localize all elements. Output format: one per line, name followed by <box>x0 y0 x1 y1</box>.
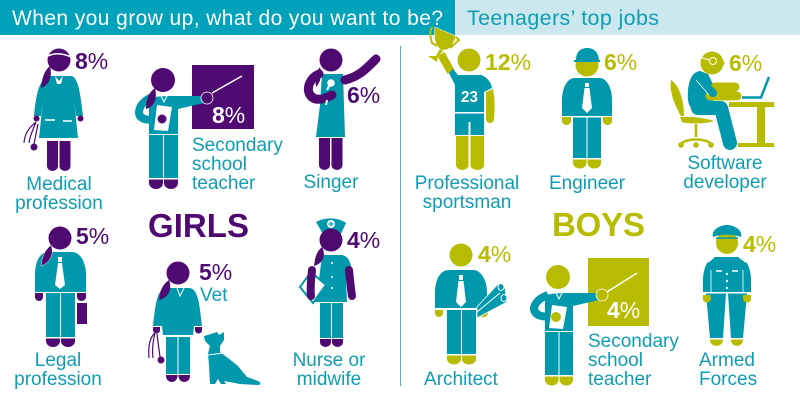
label: professional sportsman: sportsman <box>423 192 511 213</box>
header: left banner: When you grow up, what do you want to be? <box>12 7 443 30</box>
centre divider <box>400 46 402 386</box>
label: software developer: Software <box>688 153 762 174</box>
label: legal profession: Legal <box>35 350 81 371</box>
value: vet 5%: 5% <box>199 259 232 285</box>
label: girl secondary school teacher: Secondary <box>192 135 283 156</box>
label: armed forces: Forces <box>699 369 757 390</box>
label: nurse or midwife: Nurse or <box>293 350 365 371</box>
figure: medical profession <box>24 48 84 171</box>
figure: girl secondary school teacher <box>139 65 254 189</box>
figure: professional sportsman <box>428 27 495 170</box>
figure: singer <box>308 48 376 170</box>
label: professional sportsman: Professional <box>415 173 519 194</box>
label: girl secondary school teacher: teacher <box>192 173 256 194</box>
value: boy teacher 4%: 4% <box>607 297 640 323</box>
value: armed forces 4%: 4% <box>743 231 776 257</box>
value: singer 6%: 6% <box>347 82 380 108</box>
value: medical 8%: 8% <box>75 48 108 74</box>
header: left banner <box>0 0 455 35</box>
icon: trophy <box>428 27 459 62</box>
header: right banner: Teenagers’ top jobs <box>467 6 659 30</box>
value: legal 5%: 5% <box>76 223 109 249</box>
label: singer: Singer <box>304 172 359 193</box>
figure: boy secondary school teacher <box>534 258 649 386</box>
value: engineer 6%: 6% <box>604 49 637 75</box>
value: girl teacher 8%: 8% <box>212 102 245 128</box>
figure: nurse or midwife <box>300 218 352 347</box>
value: nurse 4%: 4% <box>347 227 380 253</box>
label: boy secondary school teacher: teacher <box>588 369 652 390</box>
label: nurse or midwife: midwife <box>297 369 361 390</box>
icon: dog <box>204 332 260 385</box>
figure: vet <box>149 262 202 382</box>
label: architect: Architect <box>424 369 499 390</box>
heading: GIRLS: GIRLS <box>148 207 249 244</box>
label: girl secondary school teacher: school <box>192 154 247 175</box>
value: architect 4%: 4% <box>478 241 511 267</box>
figure: professional sportsman: 23 <box>461 89 478 106</box>
label: armed forces: Armed <box>699 350 755 371</box>
figure: architect <box>435 244 507 364</box>
value: developer 6%: 6% <box>729 50 762 76</box>
value: sportsman 12%: 12% <box>485 49 531 75</box>
icon: laptop <box>742 77 769 98</box>
figure: legal profession <box>35 226 87 347</box>
figure: software developer <box>671 52 774 148</box>
label: software developer: developer <box>683 172 767 193</box>
label: medical profession: profession <box>15 193 103 214</box>
label: boy secondary school teacher: Secondary <box>588 331 679 352</box>
icon: desk <box>729 102 774 147</box>
label: boy secondary school teacher: school <box>588 350 643 371</box>
label: engineer: Engineer <box>549 173 626 194</box>
icon: rolled plans <box>477 284 507 318</box>
label: medical profession: Medical <box>26 174 92 195</box>
label: vet: Vet <box>200 285 228 306</box>
figure: armed forces <box>703 225 751 346</box>
figure: engineer <box>562 48 612 168</box>
header: right banner <box>455 0 800 35</box>
icon: chair <box>671 80 714 148</box>
label: legal profession: profession <box>14 369 102 390</box>
heading: BOYS: BOYS <box>552 206 645 243</box>
